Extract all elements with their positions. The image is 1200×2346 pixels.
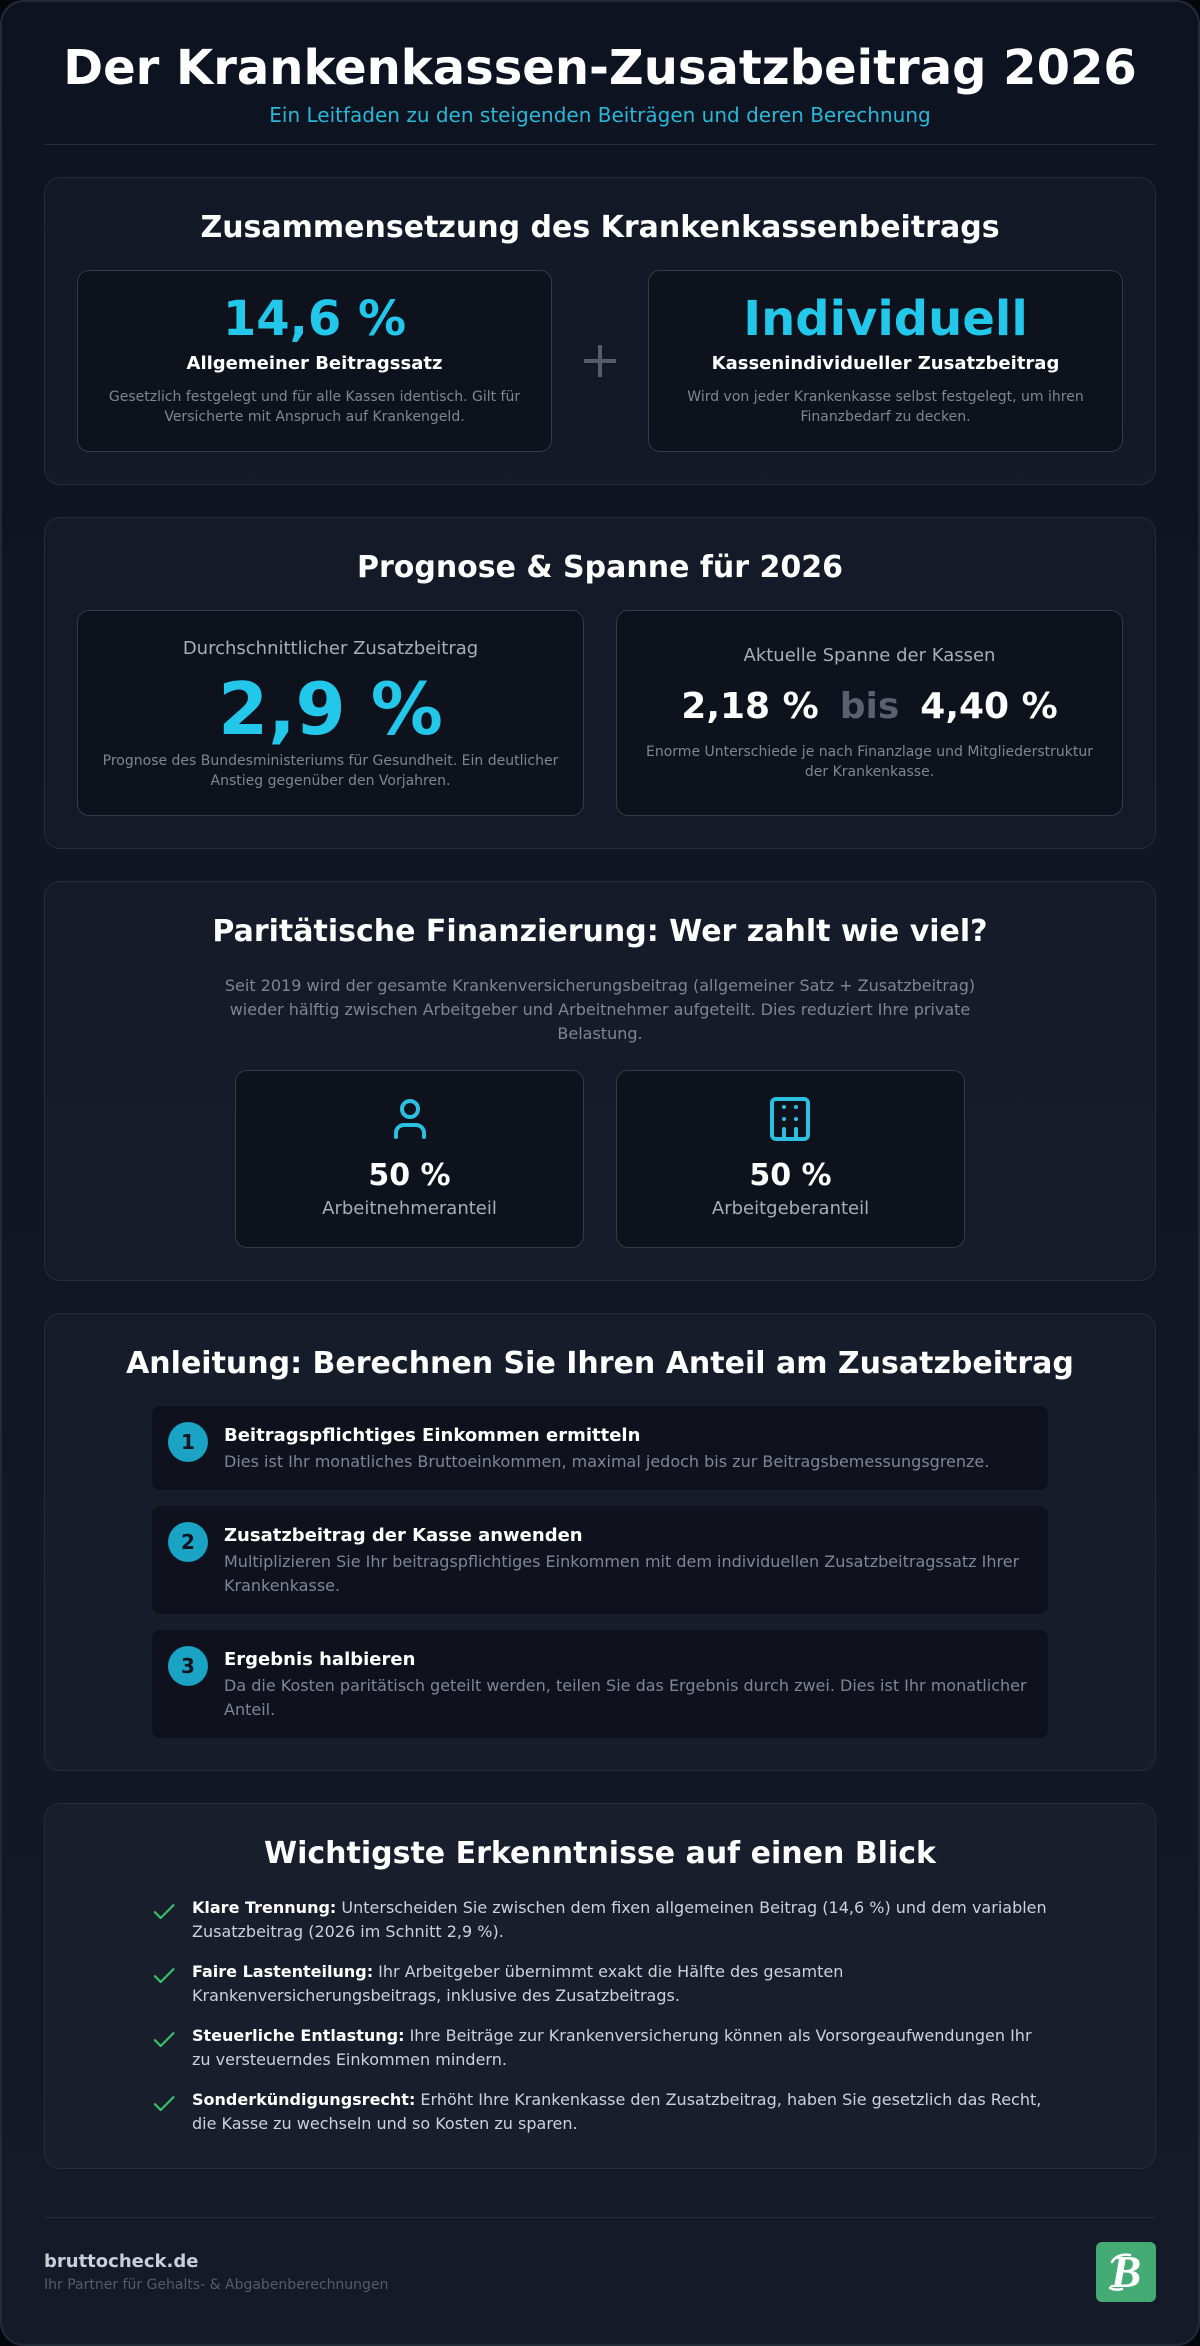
- takeaway 3: [154, 2026, 1032, 2069]
- number: [168, 1646, 208, 1686]
- heading: Wichtigste Erkenntnisse auf einen Blick: [264, 1836, 936, 1871]
- text: [192, 1898, 1047, 1941]
- description: [687, 389, 1084, 425]
- step 1: [152, 1406, 1048, 1490]
- takeaway 2: [154, 1962, 843, 2005]
- value: 50 %: [749, 1158, 832, 1193]
- label: Kassenindividueller Zusatzbeitrag: [712, 353, 1059, 374]
- value: 50 %: [368, 1158, 451, 1193]
- icon: check: [154, 1968, 175, 1984]
- description: Versicherte mit Anspruch auf Krankengeld.: [164, 409, 465, 425]
- number: 1: [181, 1430, 195, 1454]
- number: 3: [181, 1654, 195, 1678]
- text: Klare Trennung: Unterscheiden Sie zwischen dem fixen allgemeinen Beitrag (14,6 %) und dem variablen: [192, 1898, 1047, 1917]
- description: [646, 744, 1093, 780]
- icon: check: [154, 1904, 175, 1920]
- paragraph: Belastung.: [557, 1024, 643, 1043]
- card: employee: [235, 1070, 584, 1248]
- step text: Krankenkasse.: [224, 1576, 340, 1595]
- number: [168, 1522, 208, 1562]
- step 2: [152, 1506, 1048, 1614]
- description: [103, 753, 558, 789]
- label: Arbeitnehmeranteil: [322, 1198, 497, 1219]
- plus sign: [584, 345, 616, 377]
- number: 2: [181, 1530, 195, 1554]
- label: Allgemeiner Beitragssatz: [187, 353, 442, 374]
- icon: check: [154, 2032, 175, 2048]
- step title: Beitragspflichtiges Einkommen ermitteln: [224, 1425, 640, 1446]
- value: Individuell: [743, 291, 1028, 347]
- description: der Krankenkasse.: [805, 764, 934, 780]
- step title: Zusatzbeitrag der Kasse anwenden: [224, 1525, 583, 1546]
- description: Gesetzlich festgelegt und für alle Kassen identisch. Gilt für: [109, 389, 520, 405]
- number: [168, 1422, 208, 1462]
- takeaway 4: [154, 2090, 1041, 2133]
- heading: Zusammensetzung des Krankenkassenbeitrags: [200, 210, 1000, 245]
- text: Sonderkündigungsrecht: Erhöht Ihre Krankenkasse den Zusatzbeitrag, haben Sie gesetzlich das Recht,: [192, 2090, 1041, 2109]
- heading: Prognose & Spanne für 2026: [357, 550, 843, 585]
- card: employer: [616, 1070, 965, 1248]
- panel: forecast: [44, 517, 1156, 849]
- footer divider: [44, 2217, 1156, 2218]
- label: Arbeitgeberanteil: [712, 1198, 869, 1219]
- text: Faire Lastenteilung: Ihr Arbeitgeber übernimmt exakt die Hälfte des gesamten: [192, 1962, 843, 1981]
- text: Zusatzbeitrag (2026 im Schnitt 2,9 %).: [192, 1922, 504, 1941]
- paragraph: [225, 976, 975, 1043]
- text: [192, 2026, 1032, 2069]
- step title: Ergebnis halbieren: [224, 1649, 415, 1670]
- brand name: bruttocheck.de: [44, 2251, 198, 2272]
- card: range: [616, 610, 1123, 816]
- tagline: Ihr Partner für Gehalts- & Abgabenberechnungen: [44, 2277, 388, 2293]
- text: Krankenversicherungsbeitrags, inklusive des Zusatzbeitrags.: [192, 1986, 680, 2005]
- description: Enorme Unterschiede je nach Finanzlage und Mitgliederstruktur: [646, 744, 1093, 760]
- icon: check: [154, 2096, 175, 2112]
- range values: 2,18 % bis 4,40 %: [681, 686, 1058, 727]
- step text: Multiplizieren Sie Ihr beitragspflichtiges Einkommen mit dem individuellen Zusatzbeitragssatz Ihrer: [224, 1552, 1019, 1571]
- label: Aktuelle Spanne der Kassen: [744, 645, 995, 666]
- icon: person: [394, 1099, 426, 1139]
- panel: instructions: [44, 1313, 1156, 1771]
- subtitle: Ein Leitfaden zu den steigenden Beiträgen und deren Berechnung: [269, 103, 931, 127]
- step text: Anteil.: [224, 1700, 275, 1719]
- panel: parity: [44, 881, 1156, 1281]
- logo: B: [1111, 2246, 1141, 2297]
- icon: building: [770, 1097, 810, 1141]
- step text: Dies ist Ihr monatliches Bruttoeinkommen, maximal jedoch bis zur Beitragsbemessungsgrenze.: [224, 1452, 989, 1471]
- value: 14,6 %: [223, 291, 406, 347]
- text: die Kasse zu wechseln und so Kosten zu sparen.: [192, 2114, 578, 2133]
- step 3: [152, 1630, 1048, 1738]
- footer brand: [44, 2251, 388, 2293]
- paragraph: Seit 2019 wird der gesamte Krankenversicherungsbeitrag (allgemeiner Satz + Zusatzbeitrag): [225, 976, 975, 995]
- header divider: [44, 144, 1156, 145]
- description: [109, 389, 520, 425]
- description: Finanzbedarf zu decken.: [800, 409, 971, 425]
- takeaway 1: [154, 1898, 1047, 1941]
- step text: Da die Kosten paritätisch geteilt werden, teilen Sie das Ergebnis durch zwei. Dies ist Ihr monatlicher: [224, 1676, 1027, 1695]
- title: Der Krankenkassen-Zusatzbeitrag 2026: [63, 40, 1137, 96]
- heading: Paritätische Finanzierung: Wer zahlt wie viel?: [212, 914, 988, 949]
- text: zu versteuerndes Einkommen mindern.: [192, 2050, 507, 2069]
- label: Durchschnittlicher Zusatzbeitrag: [183, 638, 478, 659]
- heading: Anleitung: Berechnen Sie Ihren Anteil am Zusatzbeitrag: [126, 1346, 1074, 1381]
- description: Anstieg gegenüber den Vorjahren.: [211, 773, 450, 789]
- value: 2,9 %: [218, 667, 443, 751]
- panel: key takeaways: [44, 1803, 1156, 2169]
- text: [192, 1962, 843, 2005]
- text: [192, 2090, 1041, 2133]
- description: Wird von jeder Krankenkasse selbst festgelegt, um ihren: [687, 389, 1084, 405]
- card: individual rate: [648, 270, 1123, 452]
- text: Steuerliche Entlastung: Ihre Beiträge zur Krankenversicherung können als Vorsorgeaufwendungen Ihr: [192, 2026, 1032, 2045]
- logo: [1096, 2242, 1156, 2302]
- description: Prognose des Bundesministeriums für Gesundheit. Ein deutlicher: [103, 753, 558, 769]
- step text: [224, 1676, 1027, 1719]
- card: general rate: [77, 270, 552, 452]
- paragraph: wieder hälftig zwischen Arbeitgeber und Arbeitnehmer aufgeteilt. Dies reduziert Ihre private: [230, 1000, 970, 1019]
- card: average: [77, 610, 584, 816]
- panel: composition: [44, 177, 1156, 485]
- step text: [224, 1552, 1020, 1595]
